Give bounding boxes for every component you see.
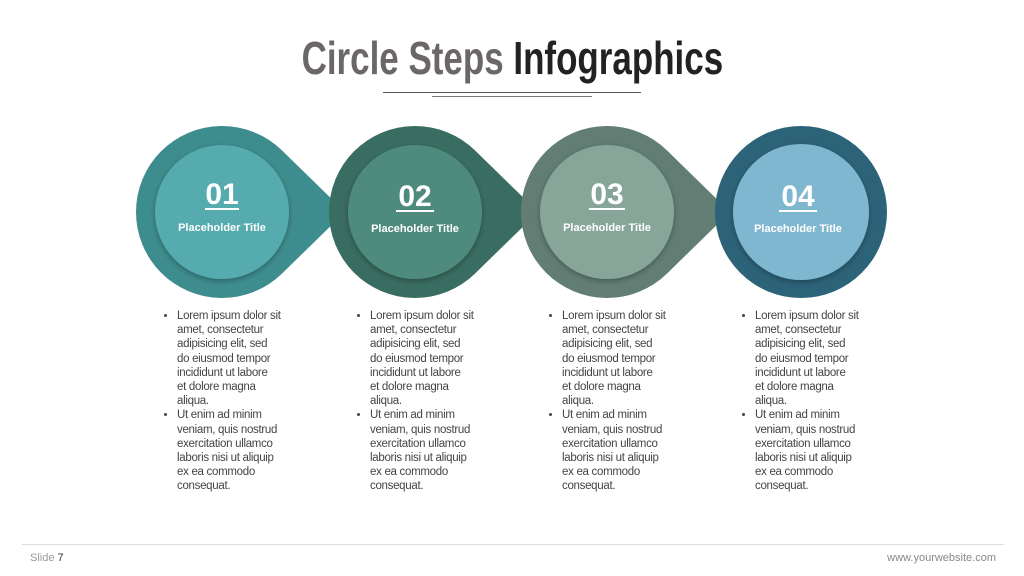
text column 2 (357, 310, 474, 492)
text column 2: laboris nisi ut aliquip (370, 452, 467, 464)
text column 2: exercitation ullamco (370, 438, 466, 450)
slide number: Slide 7 (30, 552, 64, 564)
step 3: Placeholder Title (563, 222, 651, 234)
text column 3: veniam, quis nostrud (562, 424, 662, 436)
text column 4: veniam, quis nostrud (755, 424, 855, 436)
footer line (22, 544, 1004, 545)
text column 2: et dolore magna (370, 381, 449, 393)
text column 2: Lorem ipsum dolor sit (370, 310, 474, 322)
text column 3: exercitation ullamco (562, 438, 658, 450)
text column 1: ex ea commodo (177, 466, 255, 478)
text column 1: adipisicing elit, sed (177, 338, 267, 350)
text column 2: ex ea commodo (370, 466, 448, 478)
website: www.yourwebsite.com (887, 552, 996, 564)
text column 1: Ut enim ad minim (177, 409, 262, 421)
step 1 (136, 126, 345, 298)
step 3 (521, 126, 730, 298)
text column 1 (164, 310, 281, 492)
text column 4: do eiusmod tempor (755, 353, 848, 365)
text column 1: et dolore magna (177, 381, 256, 393)
text column 1: Lorem ipsum dolor sit (177, 310, 281, 322)
text column 1: exercitation ullamco (177, 438, 273, 450)
text column 4: ex ea commodo (755, 466, 833, 478)
text column 4: exercitation ullamco (755, 438, 851, 450)
text column 4: laboris nisi ut aliquip (755, 452, 852, 464)
text column 4: amet, consectetur (755, 324, 841, 336)
text column 3: ex ea commodo (562, 466, 640, 478)
text column 2: Ut enim ad minim (370, 409, 455, 421)
text column 1: laboris nisi ut aliquip (177, 452, 274, 464)
text column 2: do eiusmod tempor (370, 353, 463, 365)
text column 1: do eiusmod tempor (177, 353, 270, 365)
text column 1: veniam, quis nostrud (177, 424, 277, 436)
text column 3: Lorem ipsum dolor sit (562, 310, 666, 322)
text column 2: aliqua. (370, 395, 402, 407)
text column 3 (549, 310, 666, 492)
text column 1: aliqua. (177, 395, 209, 407)
text column 3: do eiusmod tempor (562, 353, 655, 365)
text column 3: laboris nisi ut aliquip (562, 452, 659, 464)
text column 4: Ut enim ad minim (755, 409, 840, 421)
text column 4: consequat. (755, 480, 808, 492)
text column 3: Ut enim ad minim (562, 409, 647, 421)
text column 1: incididunt ut labore (177, 367, 268, 379)
text column 1: consequat. (177, 480, 230, 492)
step 2: 02 (398, 180, 432, 213)
step 2: Placeholder Title (371, 223, 459, 235)
step 1: Placeholder Title (178, 222, 266, 234)
title underline (383, 92, 641, 93)
text column 4: incididunt ut labore (755, 367, 846, 379)
text column 3: amet, consectetur (562, 324, 648, 336)
text column 3: incididunt ut labore (562, 367, 653, 379)
step 2 (329, 126, 538, 298)
step 3: 03 (590, 178, 624, 211)
text column 3: et dolore magna (562, 381, 641, 393)
text column 2: consequat. (370, 480, 423, 492)
text column 1: amet, consectetur (177, 324, 263, 336)
text column 2: amet, consectetur (370, 324, 456, 336)
step 4: 04 (781, 180, 815, 213)
text column 2: veniam, quis nostrud (370, 424, 470, 436)
text column 4: Lorem ipsum dolor sit (755, 310, 859, 322)
text column 4: et dolore magna (755, 381, 834, 393)
step 4: Placeholder Title (754, 223, 842, 235)
step 1: 01 (205, 178, 239, 211)
text column 4 (742, 310, 859, 492)
title: Circle Steps Infographics (301, 32, 723, 84)
text column 4: aliqua. (755, 395, 787, 407)
text column 3: consequat. (562, 480, 615, 492)
text column 2: incididunt ut labore (370, 367, 461, 379)
text column 3: adipisicing elit, sed (562, 338, 652, 350)
text column 4: adipisicing elit, sed (755, 338, 845, 350)
text column 3: aliqua. (562, 395, 594, 407)
text column 2: adipisicing elit, sed (370, 338, 460, 350)
step 4 (715, 126, 887, 298)
